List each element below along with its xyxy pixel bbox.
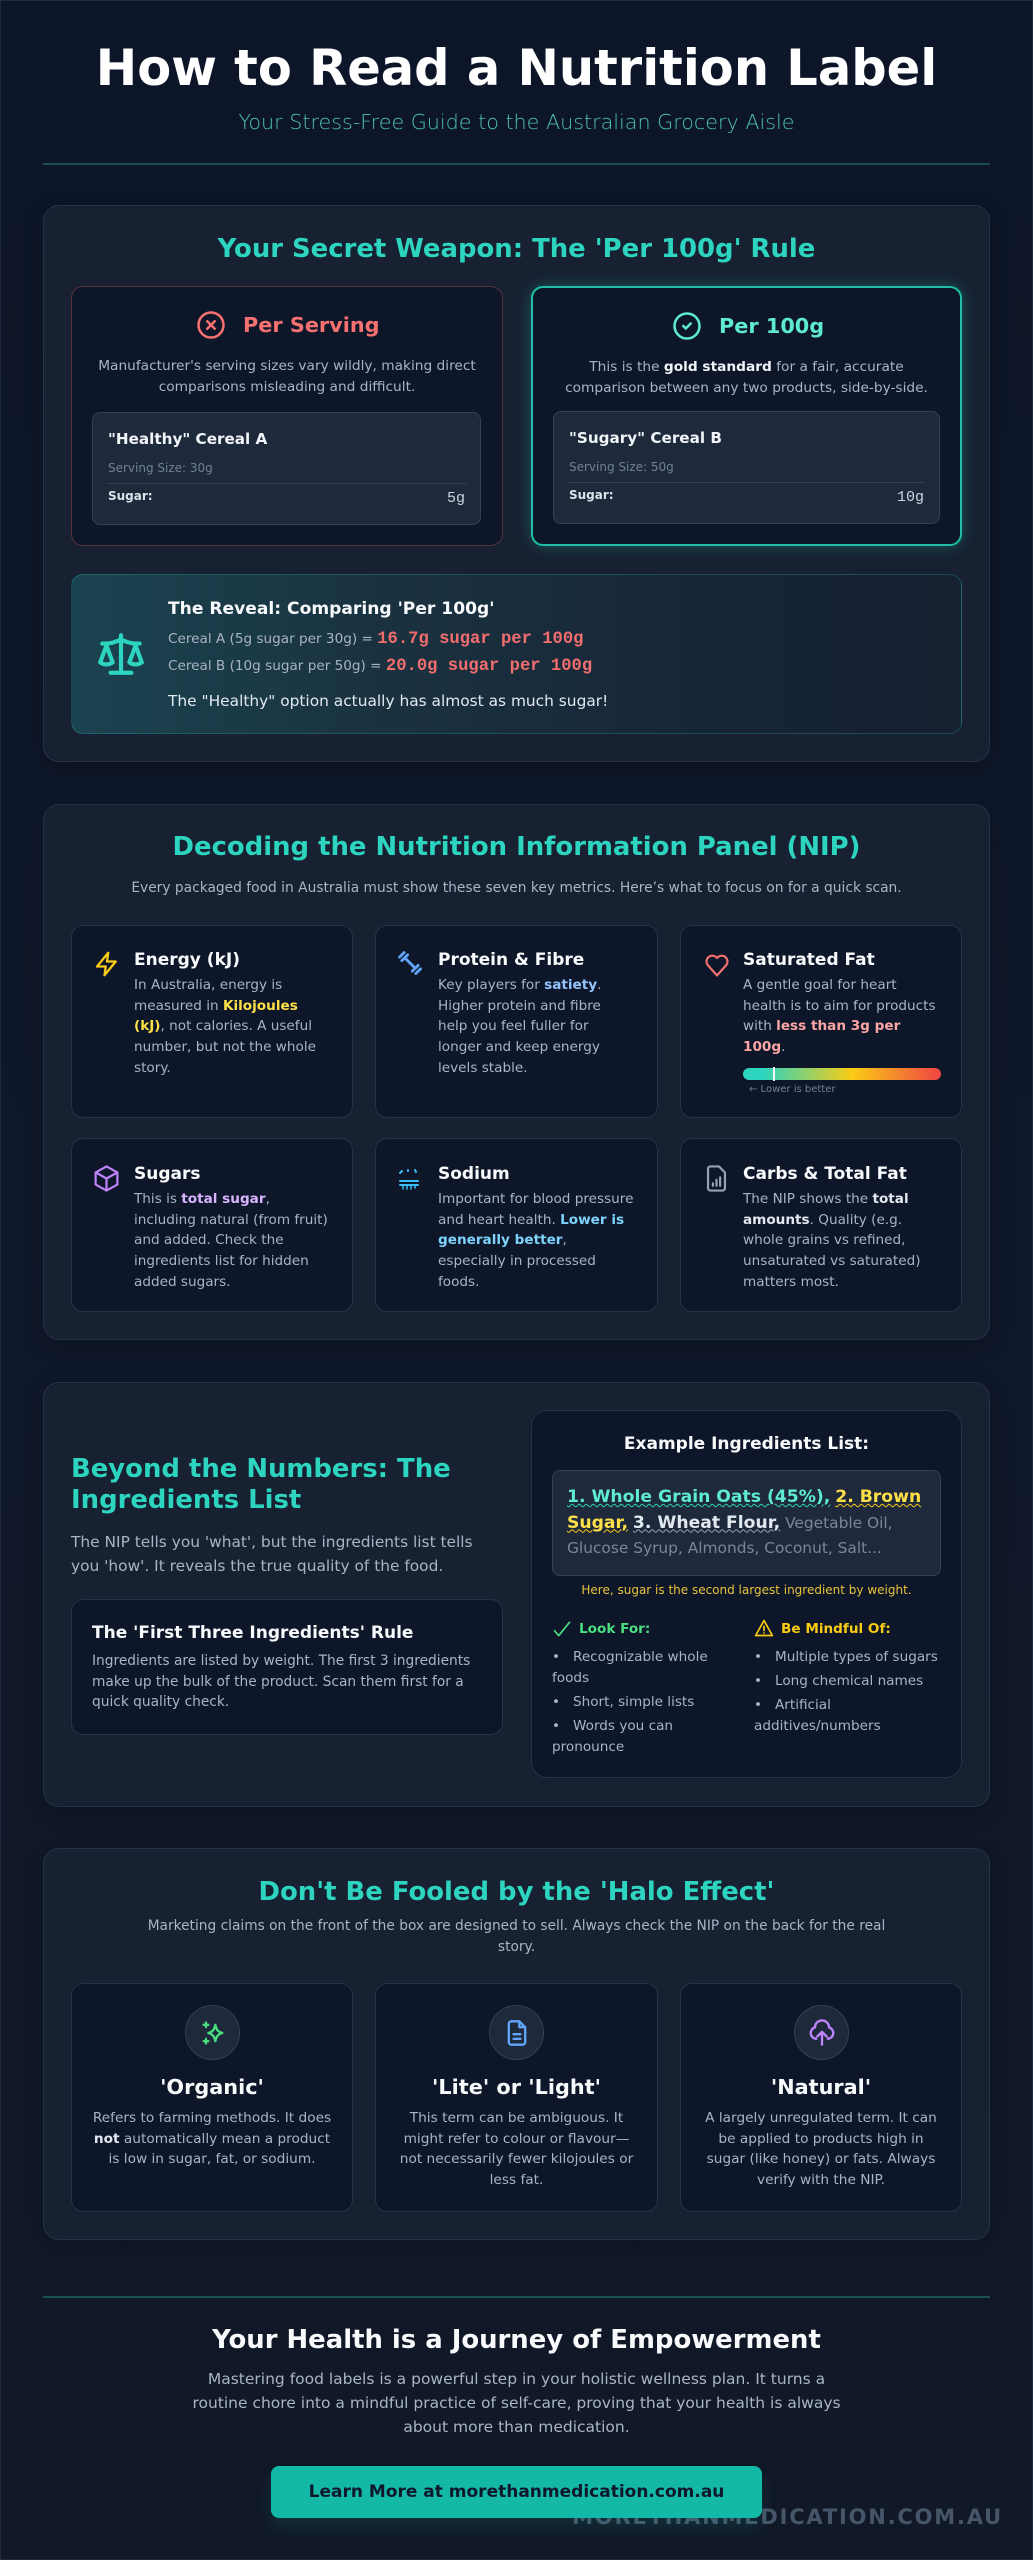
card: organic [71,1983,353,2212]
sodium text: generally better, [438,1232,567,1248]
card: per 100g [531,286,962,546]
carbs text: matters most. [743,1274,839,1290]
icon: scales [98,633,144,675]
cereal A serving: Serving Size: 30g [108,461,213,475]
icon: sparkles circle [185,2005,240,2060]
cereal B serving: Serving Size: 50g [569,460,674,474]
natural text: sugar (like honey) or fats. Always [707,2151,935,2167]
icon: check circle [673,312,701,340]
panel: ingredients [43,1382,990,1807]
example title: Example Ingredients List: [624,1434,869,1454]
natural text: verify with the NIP. [757,2172,885,2188]
carbs text: The NIP shows the total [743,1191,909,1207]
sugars text: and added. Check the [134,1232,284,1248]
lite text: less fat. [490,2172,543,2188]
be mindful list: • Multiple types of sugars [754,1649,938,1665]
organic title: 'Organic' [160,2075,264,2099]
icon: file circle [489,2005,544,2060]
sugars text: ingredients list for hidden [134,1253,309,1269]
reveal line B: Cereal B (10g sugar per 50g) = 20.0g sugar per 100g [168,657,592,676]
organic text: is low in sugar, fat, or sodium. [108,2151,316,2167]
card: per serving [71,286,503,546]
sugars text: including natural (from fruit) [134,1212,328,1228]
energy text: measured in Kilojoules [134,998,298,1014]
saturated fat title: Saturated Fat [743,950,875,970]
lite text: This term can be ambiguous. It [410,2110,623,2126]
per serving text [98,358,476,395]
sodium text: especially in processed [438,1253,596,1269]
lite title: 'Lite' or 'Light' [432,2075,601,2099]
sodium text [438,1191,633,1290]
panel: per 100g rule [43,205,990,762]
rule title: The 'First Three Ingredients' Rule [92,1623,413,1643]
button [271,2466,762,2518]
saturated fat text [743,977,936,1055]
cereal A sugar value: 5g [447,490,465,507]
sugars text: This is total sugar, [134,1191,270,1207]
be mindful list [754,1649,938,1734]
example ingredients text: 1. Whole Grain Oats (45%), 2. Brown [567,1487,921,1507]
per serving text: Manufacturer's serving sizes vary wildly, making direct [98,358,476,374]
card: saturated fat [680,925,962,1118]
heading: ingredients: Ingredients List [71,1485,301,1515]
cereal A sugar label: Sugar: [108,489,153,503]
footer heading: Your Health is a Journey of Empowerment [212,2325,821,2355]
rule text [92,1653,470,1710]
icon: x circle [197,311,225,339]
watermark: MORETHANMEDICATION.COM.AU [572,2505,1003,2529]
icon: heart [705,954,729,977]
be mindful list: additives/numbers [754,1718,881,1734]
lite text: not necessarily fewer kilojoules or [400,2151,633,2167]
reveal line A: Cereal A (5g sugar per 30g) = 16.7g sugar per 100g [168,630,584,649]
carbs text [742,1191,921,1290]
energy title: Energy (kJ) [134,950,240,970]
card: energy [71,925,353,1118]
saturated fat text: with less than 3g per [743,1018,900,1034]
carbs text: amounts. Quality (e.g. [743,1212,902,1228]
cereal A title: "Healthy" Cereal A [108,430,267,448]
card: natural [680,1983,962,2212]
look for list: • Recognizable whole [552,1649,708,1665]
heading: secret weapon: Your Secret Weapon: The 'Per 100g' Rule [218,234,815,264]
sugars text [134,1191,328,1290]
icon: check [554,1622,570,1636]
heading: ingredients [71,1454,451,1515]
protein text [438,977,601,1076]
cereal B sugar value: 10g [897,489,924,506]
ingredients intro [70,1533,473,1575]
protein text: levels stable. [438,1060,528,1076]
look for list: • Words you can [552,1718,673,1734]
look for list [552,1649,708,1755]
footer text: Mastering food labels is a powerful step in your holistic wellness plan. It turns a [208,2370,825,2388]
natural text: be applied to products high in [718,2131,924,2147]
organic text [93,2110,331,2167]
panel: halo effect [43,1848,990,2240]
icon: lightning [96,952,117,976]
halo intro: Marketing claims on the front of the box are designed to sell. Always check the NIP on the back for the real [148,1918,885,1934]
card: lite [375,1983,658,2212]
rule text: quick quality check. [92,1694,229,1710]
natural text: A largely unregulated term. It can [705,2110,937,2126]
protein text: longer and keep energy [438,1039,600,1055]
reveal conclusion: The "Healthy" option actually has almost as much sugar! [168,692,608,710]
energy text [134,977,316,1076]
reveal box [71,574,962,734]
icon: salt [399,1169,419,1190]
panel: NIP [43,804,990,1340]
footer [192,2325,841,2530]
lite text [400,2110,634,2188]
be mindful list: • Artificial [754,1697,831,1713]
icon: cube [94,1165,118,1192]
rule box [71,1599,503,1735]
sugars title: Sugars [134,1164,200,1184]
carbs title: Carbs & Total Fat [743,1164,907,1184]
look for list: pronounce [552,1739,624,1755]
heading: ingredients: Beyond the Numbers: The [71,1454,451,1484]
ingredients intro: The NIP tells you 'what', but the ingredients list tells [71,1533,473,1551]
sugars text: added sugars. [134,1274,231,1290]
halo intro [148,1918,885,1955]
per serving heading: Per Serving [243,313,380,337]
heading: halo: Don't Be Fooled by the 'Halo Effect' [259,1877,774,1907]
NIP intro: Every packaged food in Australia must show these seven key metrics. Here’s what to focus on for a quick scan. [131,880,902,896]
protein text: Higher protein and fibre [438,998,601,1014]
look for list: foods [552,1670,589,1686]
per 100g heading: Per 100g [719,314,824,338]
header [96,39,937,134]
energy text: story. [134,1060,171,1076]
example ingredients text: Glucose Syrup, Almonds, Coconut, Salt... [567,1539,882,1557]
card: carbs and fat [680,1138,962,1312]
saturated fat text: 100g. [743,1039,785,1055]
rule text: Ingredients are listed by weight. The first 3 ingredients [92,1653,470,1669]
lite text: might refer to colour or flavour— [404,2131,629,2147]
be mindful column [754,1620,938,1734]
halo intro: story. [498,1939,535,1955]
sodium text: foods. [438,1274,479,1290]
gauge caption: ← Lower is better [749,1084,835,1095]
cereal B title: "Sugary" Cereal B [569,429,722,447]
icon: cloud circle [794,2005,849,2060]
sodium text: Important for blood pressure [438,1191,633,1207]
icon: file chart [706,1165,726,1192]
card: protein [375,925,658,1118]
saturated fat text: A gentle goal for heart [743,977,897,993]
per 100g text: comparison between any two products, side-by-side. [565,380,928,396]
sodium title: Sodium [438,1164,510,1184]
look for title: Look For: [579,1621,650,1637]
protein text: Key players for satiety. [438,977,601,993]
footer text: about more than medication. [403,2418,630,2436]
example list box [552,1470,941,1576]
example ingredients text: Sugar, 3. Wheat Flour, Vegetable Oil, [567,1513,893,1533]
heading: NIP: Decoding the Nutrition Information Panel (NIP) [173,832,860,862]
organic text: Refers to farming methods. It does [93,2110,331,2126]
sodium text: and heart health. Lower is [438,1212,624,1228]
ingredients intro: you 'how'. It reveals the true quality of the food. [71,1557,443,1575]
look for list: • Short, simple lists [552,1694,694,1710]
protein title: Protein & Fibre [438,950,584,970]
title: How to Read a Nutrition Label [96,39,937,97]
icon: dumbbell [398,951,422,975]
gauge: lower is better [743,1068,941,1080]
natural title: 'Natural' [771,2075,871,2099]
look for column [552,1621,708,1755]
cereal B sugar label: Sugar: [569,488,614,502]
energy text: In Australia, energy is [134,977,282,993]
footer text [192,2370,841,2436]
saturated fat text: health is to aim for products [743,998,936,1014]
energy text: number, but not the whole [134,1039,316,1055]
cereal B box [553,411,940,524]
reveal title: The Reveal: Comparing 'Per 100g' [168,599,494,619]
rule text: make up the bulk of the product. Scan them first for a [92,1674,464,1690]
be mindful list: • Long chemical names [754,1673,923,1689]
footer text: routine chore into a mindful practice of self-care, proving that your health is always [192,2394,841,2412]
protein text: help you feel fuller for [438,1018,589,1034]
card: sodium [375,1138,658,1312]
button: Learn More at morethanmedication.com.au [309,2482,724,2502]
natural text [705,2110,937,2188]
energy text: (kJ), not calories. A useful [134,1018,312,1034]
carbs text: whole grains vs refined, [743,1232,905,1248]
example ingredients text [567,1487,922,1557]
cereal A box [92,412,481,525]
card: sugars [71,1138,353,1312]
carbs text: unsaturated vs saturated) [743,1253,921,1269]
icon: warning [754,1620,774,1636]
card: example ingredients [531,1410,962,1778]
per 100g text [565,359,928,396]
be mindful title: Be Mindful Of: [781,1621,891,1637]
example note: Here, sugar is the second largest ingredient by weight. [581,1583,912,1597]
per 100g text: This is the gold standard for a fair, accurate [589,359,904,375]
organic text: not automatically mean a product [94,2131,330,2147]
per serving text: comparisons misleading and difficult. [159,379,415,395]
subtitle: Your Stress-Free Guide to the Australian Grocery Aisle [239,110,794,134]
